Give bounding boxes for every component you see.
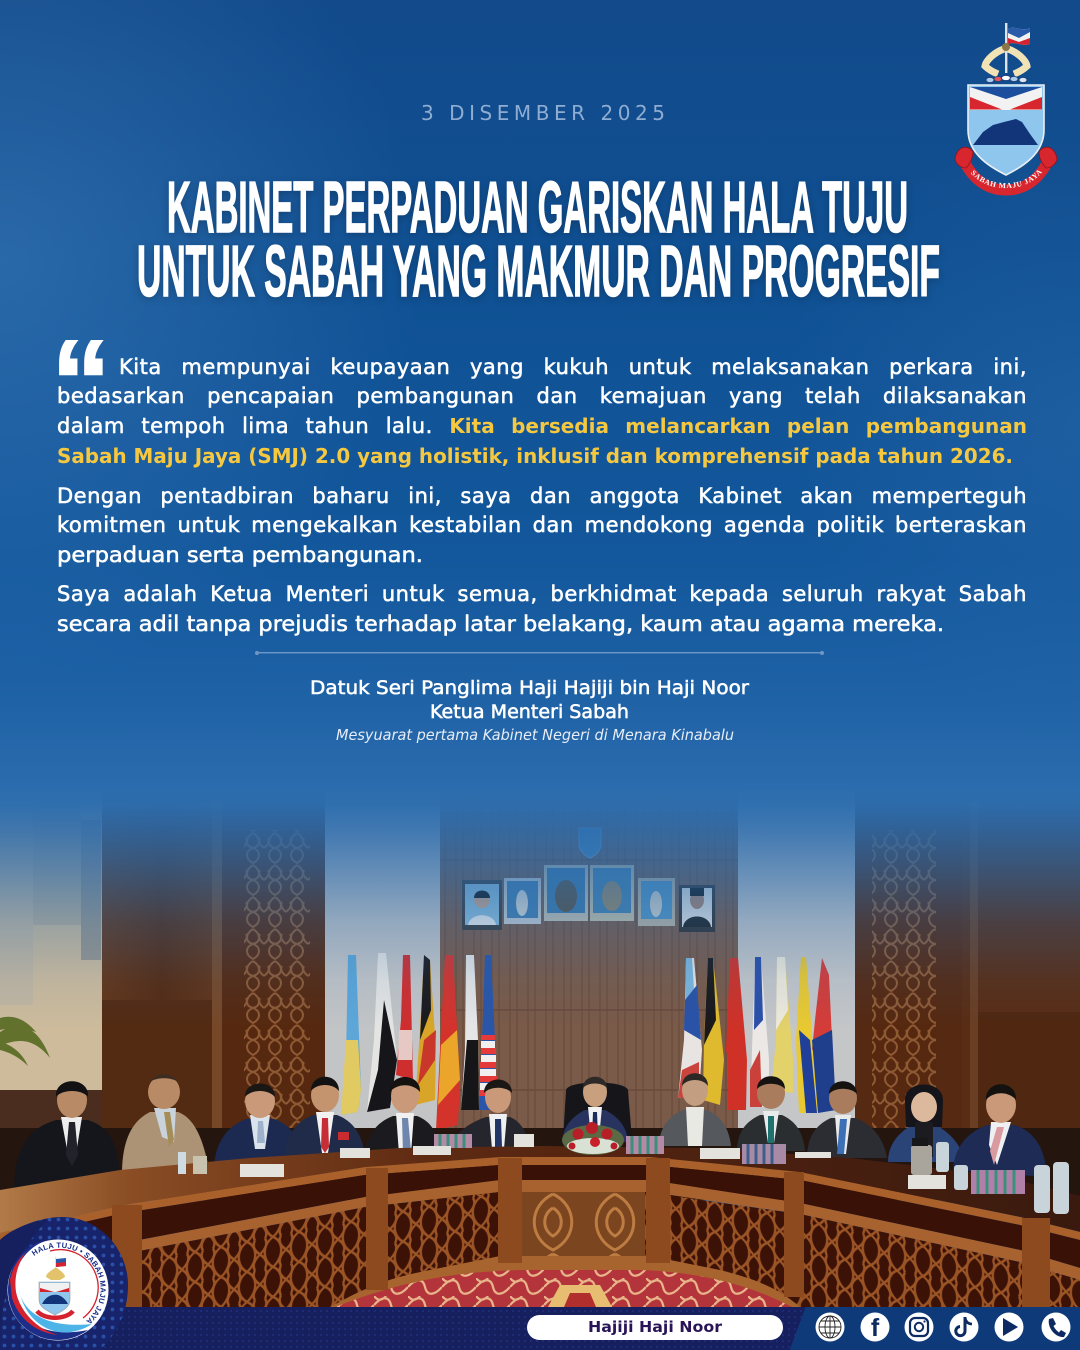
delegate 4 <box>285 1077 365 1157</box>
delegate 1 <box>14 1081 122 1190</box>
icon: facebook <box>860 1312 890 1342</box>
name pill <box>527 1315 783 1340</box>
delegate 9 <box>737 1076 805 1151</box>
body closing lines: Sabah Maju Jaya (SMJ) 2.0 yang holistik, inklusif dan komprehensif pada tahun 2026. <box>57 444 1013 468</box>
centre wood wall <box>440 814 738 1128</box>
icon: youtube play <box>994 1312 1024 1342</box>
left wall <box>0 810 102 1128</box>
flag pole <box>1005 23 1007 73</box>
carved table panels <box>142 1192 1080 1307</box>
paragraph 3 line: Saya adalah Ketua Menteri untuk semua, berkhidmat kepada seluruh rakyat Sabah <box>57 582 1027 606</box>
delegates <box>14 1073 1047 1190</box>
quote body: bedasarkan pencapaian pembangunan dan kemajuan yang telah dilaksanakan <box>57 384 1027 408</box>
delegate 8 <box>659 1073 731 1146</box>
icon: instagram <box>904 1312 934 1342</box>
flags left <box>341 953 497 1130</box>
ribbon <box>954 146 1058 196</box>
paragraph 1 lines <box>57 355 1027 438</box>
table base ledge <box>330 1256 800 1307</box>
flags right <box>678 957 836 1113</box>
quote body: dalam tempoh lima tahun lalu. Kita bersedia melancarkan pelan pembangunan <box>57 414 1027 438</box>
attribution: Datuk Seri Panglima Haji Hajiji bin Haji Noor <box>310 677 749 699</box>
body closing lines: perpaduan serta pembangunan. <box>57 543 423 567</box>
delegate 2 <box>122 1074 208 1174</box>
attribution: Mesyuarat pertama Kabinet Negeri di Menara Kinabalu <box>336 726 734 744</box>
delegate 5 <box>366 1077 436 1150</box>
body closing lines: secara adil tanpa prejudis terhadap latar belakang, kaum atau agama mereka. <box>57 612 944 636</box>
carpet <box>335 1270 792 1307</box>
small state crest <box>37 1257 73 1318</box>
icon: facebook: f <box>871 1314 880 1342</box>
attribution: Ketua Menteri Sabah <box>430 701 629 723</box>
papers and bottles <box>178 1134 946 1189</box>
navy dotted sphere <box>0 1217 128 1350</box>
table pillars <box>112 1158 1050 1307</box>
white disc <box>8 1240 108 1340</box>
bottom bar left <box>0 1307 806 1350</box>
bottom bar right <box>790 1307 1080 1350</box>
chairman chair <box>563 1082 632 1140</box>
quote body: Kita mempunyai keupayaan yang kukuh untuk melaksanakan perkara ini, <box>119 355 1027 379</box>
quote body: Dengan pentadbiran baharu ini, saya dan anggota Kabinet akan memperteguh <box>57 484 1027 508</box>
light wall right <box>738 810 855 1128</box>
wood panel right <box>962 810 1080 1128</box>
attribution <box>310 677 749 744</box>
delegate 3 <box>214 1084 292 1162</box>
meeting photo <box>0 790 1080 1307</box>
light wall left <box>325 810 440 1128</box>
quote body: komitmen untuk mengekalkan kestabilan dan mendokong agenda politik berteraskan <box>57 513 1027 537</box>
swooshes <box>8 1240 88 1340</box>
ring arc <box>50 1250 98 1318</box>
shield <box>968 85 1044 175</box>
divider <box>255 651 824 655</box>
chair row behind delegates <box>0 1128 1080 1200</box>
delegate 10 <box>807 1081 887 1158</box>
tissue boxes <box>434 1134 1025 1194</box>
icon: tiktok <box>950 1312 978 1342</box>
delegate 12 <box>953 1084 1047 1177</box>
blue fade over photo <box>0 789 1080 1029</box>
badge: hala tuju <box>0 1217 128 1350</box>
delegate 6 <box>458 1080 526 1147</box>
portraits <box>462 865 715 932</box>
paragraph 2 lines <box>57 484 1027 537</box>
table front band <box>0 1157 1080 1284</box>
body closing lines <box>57 444 1013 636</box>
wood panel left <box>102 810 325 1128</box>
delegate 11 <box>888 1084 964 1162</box>
beads <box>986 75 1027 83</box>
state crest top right <box>954 23 1058 196</box>
table top <box>0 1146 1080 1233</box>
ring text: HALA TUJU • SABAH MAJU JAYA <box>32 1242 106 1324</box>
ribbon: SABAH MAJU JAYA <box>970 170 1042 188</box>
table items <box>178 1122 1069 1214</box>
date: 3 DISEMBER 2025 <box>421 101 665 125</box>
arms <box>985 43 1027 74</box>
social icons <box>816 1312 1070 1342</box>
opening quote mark: “ <box>51 315 111 449</box>
plant <box>0 1017 50 1066</box>
delegate 7 <box>562 1077 628 1142</box>
thermos <box>911 1138 932 1175</box>
title <box>137 168 940 312</box>
wall emblem <box>579 828 601 858</box>
carved column right <box>855 810 962 1128</box>
carved column left <box>222 810 325 1128</box>
water bottles <box>936 1142 1069 1214</box>
icon: website globe <box>816 1312 844 1342</box>
state flag <box>1008 28 1030 45</box>
quote body <box>57 355 1027 606</box>
solid navy left of sphere <box>0 1219 48 1350</box>
icon: phone <box>1042 1312 1070 1342</box>
name pill: Hajiji Haji Noor <box>588 1318 723 1336</box>
flower arrangement <box>562 1122 624 1155</box>
